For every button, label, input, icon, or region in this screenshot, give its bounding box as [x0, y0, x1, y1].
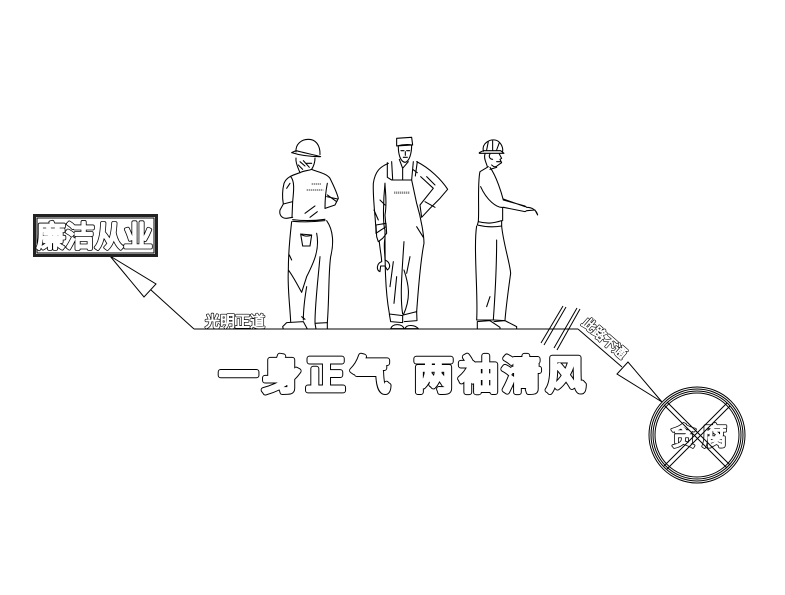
prohibition sign: 贪腐	[649, 387, 745, 483]
right route arrow	[578, 329, 662, 402]
worker: front view with wrench	[373, 137, 448, 329]
sign: 廉洁从业: 廉洁从业	[36, 220, 153, 254]
prohibition sign: 贪腐: 贪腐	[671, 423, 727, 451]
worker: back view	[280, 139, 338, 329]
path label: 光明正道: 光明正道	[205, 314, 265, 330]
path label: 此路不通: 此路不通	[579, 315, 630, 362]
ground line	[194, 328, 578, 330]
title: 一身正气两袖清风	[219, 355, 585, 398]
break marks	[541, 306, 580, 350]
prohibition sign: 贪腐: 贪腐	[671, 423, 727, 451]
path label: 光明正道: 光明正道	[205, 314, 265, 330]
path label: 此路不通: 此路不通	[579, 315, 630, 362]
worker: side view pointing	[475, 140, 538, 329]
title: 一身正气两袖清风	[219, 355, 585, 398]
sign: 廉洁从业: 廉洁从业	[36, 220, 153, 254]
left route arrow	[110, 256, 194, 329]
